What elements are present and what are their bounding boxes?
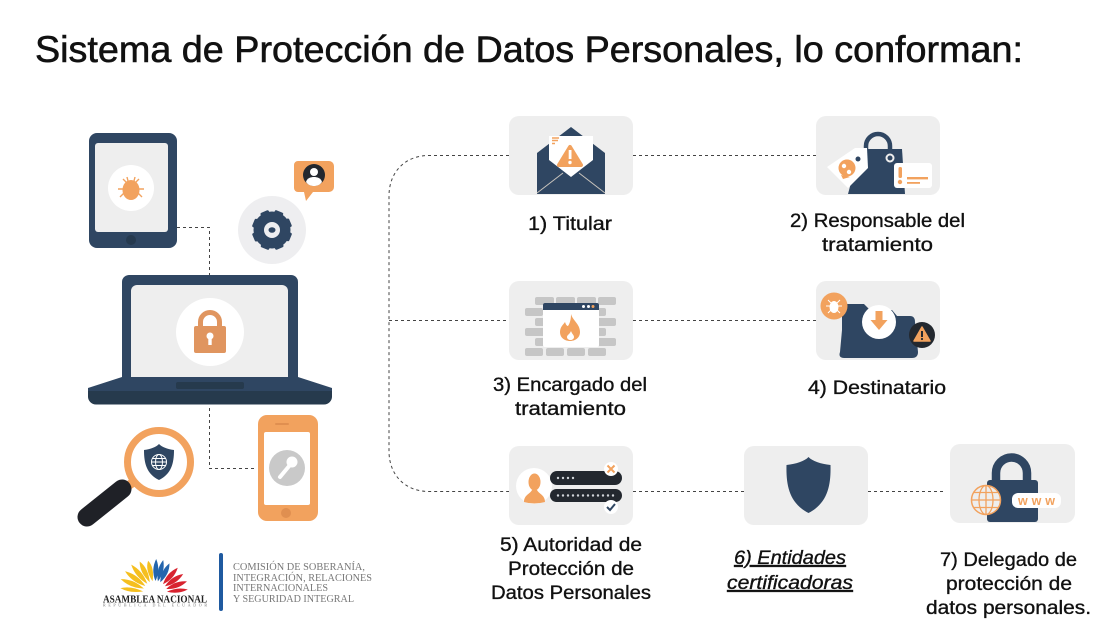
label 6: certificadoras bbox=[727, 572, 853, 594]
left device connectors bbox=[177, 228, 257, 468]
label 5 bbox=[491, 534, 651, 604]
label 3: tratamiento bbox=[515, 398, 626, 420]
logo divider bbox=[219, 553, 223, 611]
icon: gear bbox=[238, 196, 306, 264]
card 5: login icon bbox=[509, 446, 633, 525]
icon: user speech bubble bbox=[294, 161, 334, 201]
icon: smartphone with key bbox=[258, 415, 318, 521]
label 7: datos personales. bbox=[926, 597, 1091, 619]
label 6 bbox=[727, 547, 853, 594]
label 3: 3) Encargado del bbox=[493, 374, 647, 396]
label 6: 6) Entidades bbox=[734, 547, 846, 569]
label 1: 1) Titular bbox=[528, 213, 613, 235]
logo wordmark: REPÚBLICA DEL ECUADOR bbox=[103, 602, 207, 608]
label 4: 4) Destinatario bbox=[808, 377, 946, 399]
card 4: folder icon bbox=[816, 281, 940, 360]
card 1: envelope icon bbox=[509, 116, 633, 195]
commission name: COMISIÓN DE SOBERANÍA, bbox=[233, 561, 365, 573]
commission name: INTEGRACIÓN, RELACIONES bbox=[233, 572, 372, 584]
label 2 bbox=[790, 210, 965, 256]
card 3: firewall icon bbox=[509, 281, 633, 360]
logo wordmark: ASAMBLEA NACIONAL bbox=[103, 594, 207, 606]
label 3 bbox=[493, 374, 647, 420]
card 2: shopping bag icon bbox=[816, 116, 940, 195]
label 2: 2) Responsable del bbox=[790, 210, 965, 232]
icon: magnifier with shield bbox=[87, 430, 190, 517]
label 5: 5) Autoridad de bbox=[500, 534, 642, 556]
label 7: 7) Delegado de bbox=[940, 549, 1077, 571]
label 2: tratamiento bbox=[822, 234, 933, 256]
flow connectors bbox=[389, 156, 944, 492]
label 5: Datos Personales bbox=[491, 582, 651, 604]
title: Sistema de Protección de Datos Personales, lo conforman: bbox=[35, 29, 1023, 70]
label 7 bbox=[926, 549, 1091, 619]
card 6: shield icon bbox=[744, 446, 868, 525]
card 7: lock and globe icon: www bbox=[1017, 494, 1055, 508]
icon: tablet with bug bbox=[89, 133, 177, 248]
logo fan bbox=[120, 559, 188, 594]
card 7: lock and globe icon bbox=[950, 444, 1075, 523]
logo: Asamblea Nacional bbox=[103, 553, 372, 611]
commission name: Y SEGURIDAD INTEGRAL bbox=[233, 594, 354, 605]
label 5: Protección de bbox=[508, 558, 634, 580]
commission name: INTERNACIONALES bbox=[233, 583, 328, 594]
commission name bbox=[233, 561, 372, 605]
label 7: protección de bbox=[946, 573, 1072, 595]
icon: laptop with padlock bbox=[88, 275, 332, 405]
